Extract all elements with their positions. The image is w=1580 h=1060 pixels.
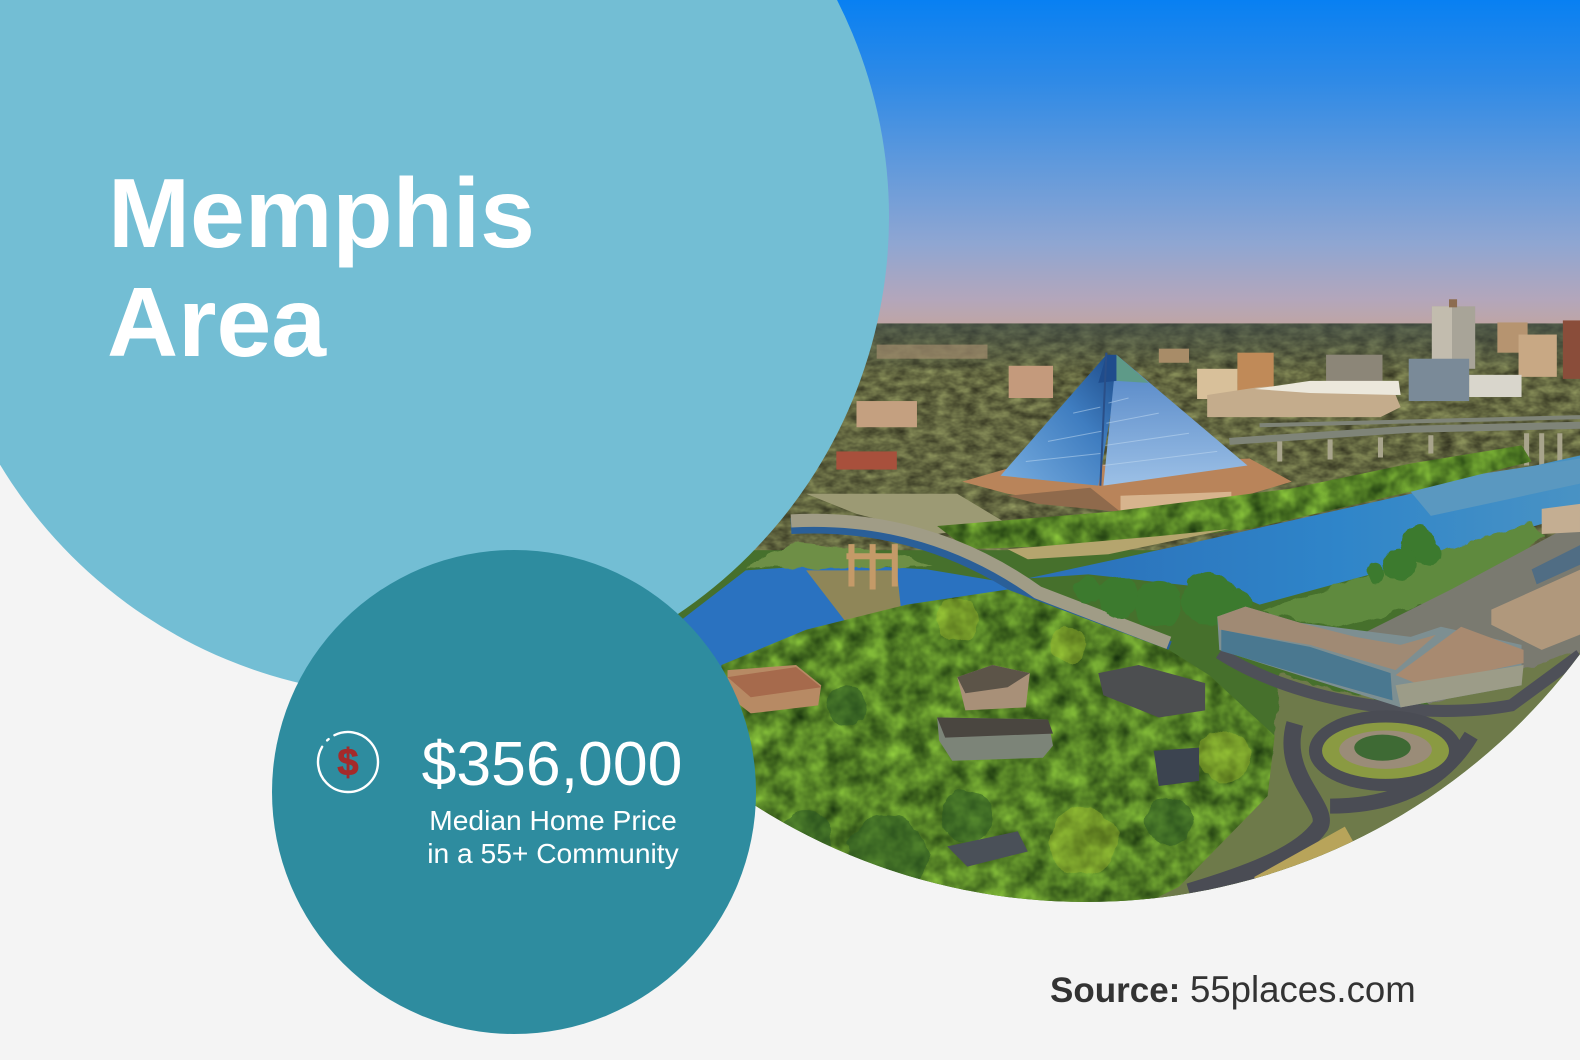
foreground houses (728, 665, 1205, 867)
source note: Source: (1050, 971, 1180, 1010)
icon: dollar coin: $ (337, 742, 359, 784)
river bank greenery (746, 445, 1532, 570)
panel: light blue title circle (0, 0, 889, 696)
city buildings (806, 299, 1580, 534)
title: Memphis (108, 158, 535, 268)
sky (837, 0, 1580, 324)
stat label (427, 804, 680, 869)
tree cluster by field (1074, 526, 1443, 629)
source note: 55places.com (1190, 969, 1416, 1010)
title: Area (107, 267, 327, 377)
townhouses (1217, 504, 1580, 707)
city ground (754, 323, 1580, 550)
foreground trees (705, 589, 1275, 917)
stat label: Median Home Price (429, 804, 677, 836)
right side parking and lots (1367, 532, 1580, 704)
lawn and road lower right (1148, 650, 1580, 899)
bridge (791, 520, 1169, 649)
photo: aerial view of Memphis skyline inside large circle (678, 0, 1580, 902)
horizon haze (869, 324, 1563, 364)
title (107, 158, 535, 377)
pyramid (962, 353, 1292, 512)
stat label: in a 55+ Community (427, 837, 680, 869)
panel: median home price circle (272, 550, 756, 1034)
grass field (1260, 522, 1544, 627)
stat: price: $356,000 (422, 729, 682, 799)
ground base (678, 550, 1580, 902)
icon: dollar coin (306, 720, 390, 804)
overpass (1229, 417, 1580, 466)
roundabout (1309, 710, 1462, 791)
river (675, 455, 1580, 670)
